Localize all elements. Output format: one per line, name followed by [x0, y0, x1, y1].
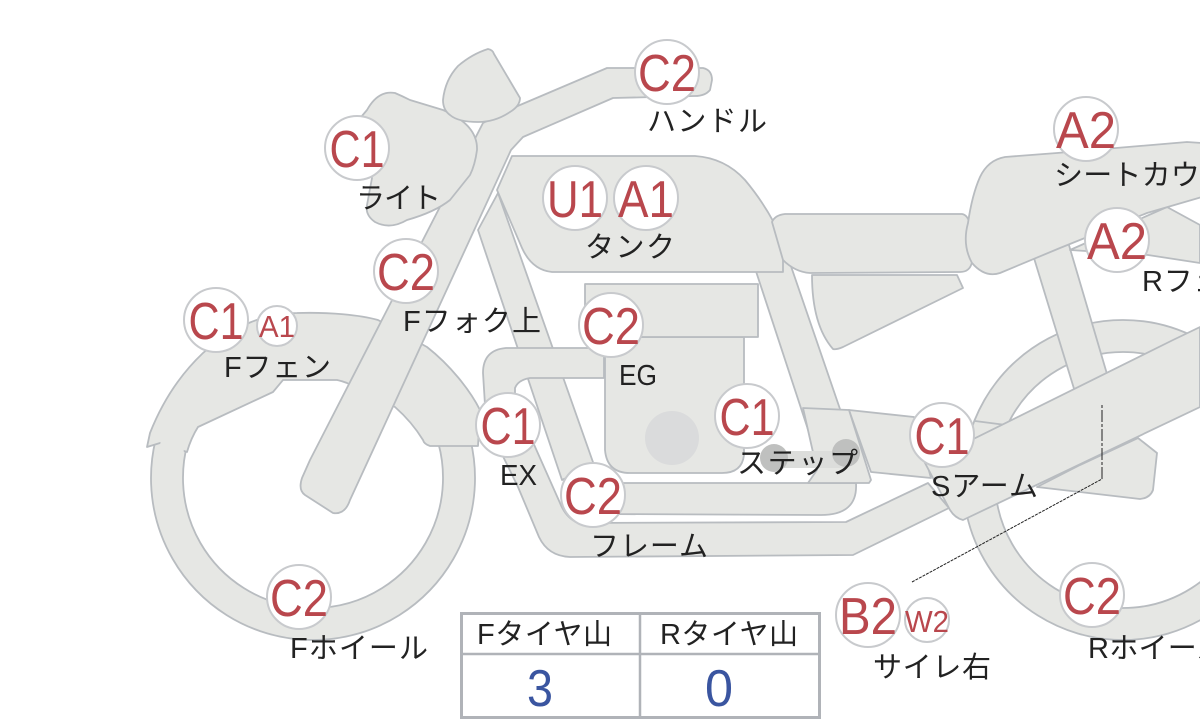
seat cowl — [966, 142, 1200, 274]
rear wheel — [963, 320, 1200, 640]
front fender — [147, 313, 480, 452]
muffler leader line — [912, 405, 1102, 582]
rear plate — [803, 408, 871, 483]
badge: exhaust C1: C1 — [480, 398, 536, 456]
badge: step C1: C1 — [720, 389, 774, 447]
label: exhaust: EX — [500, 460, 537, 492]
engine — [605, 337, 744, 473]
label: step: ステップ — [737, 448, 858, 480]
table header: rear tyre: Rタイヤ山 — [660, 619, 798, 651]
swing arm strip — [925, 327, 1200, 520]
badge: light C1: C1 — [330, 121, 384, 179]
side cover — [812, 275, 963, 349]
table value: front tyre: 3 — [527, 660, 553, 718]
engine crank circle — [645, 411, 699, 465]
rear axle plate — [1037, 438, 1157, 499]
badge: front fender A1: A1 — [259, 309, 295, 344]
badge: rear wheel C2: C2 — [1063, 568, 1121, 626]
badge: tank U1: U1 — [547, 171, 603, 229]
rear frame tube — [749, 240, 841, 460]
fuel tank — [497, 156, 783, 272]
label: handle: ハンドル — [647, 106, 767, 138]
table: tyre tread — [461, 613, 820, 718]
engine head — [585, 284, 758, 337]
badge: frame C2: C2 — [564, 468, 622, 526]
label: front fender: Fフェン — [224, 352, 331, 384]
lower frame — [495, 440, 949, 557]
table header: front tyre: Fタイヤ山 — [477, 619, 612, 651]
rear wheel fender end line — [975, 421, 1006, 425]
front fork and handlebar — [301, 68, 712, 513]
label: frame: フレーム — [590, 531, 708, 563]
seat — [772, 214, 972, 273]
badge: seat cowl A2: A2 — [1056, 102, 1116, 160]
label: upper fork: Fフォク上 — [403, 306, 541, 338]
badge: front wheel C2: C2 — [270, 570, 328, 628]
badge: handle C2: C2 — [638, 45, 696, 103]
badge: swing arm C1: C1 — [914, 408, 970, 466]
badge: tank A1: A1 — [618, 171, 674, 229]
frame down tube — [478, 193, 594, 480]
badge: rear fender A2: A2 — [1087, 213, 1147, 271]
label: light: ライト — [356, 183, 441, 215]
table value: rear tyre: 0 — [705, 660, 733, 718]
badge: engine C2: C2 — [582, 298, 640, 356]
meter — [443, 49, 520, 122]
badge: fork C2: C2 — [377, 244, 435, 302]
badge: muffler B2: B2 — [839, 588, 897, 646]
rear shock — [1030, 235, 1107, 392]
swing arm — [849, 410, 931, 478]
exhaust pipe — [483, 348, 604, 405]
label: swing arm: Sアーム — [931, 471, 1038, 503]
label: engine: EG — [619, 360, 657, 392]
badge: front fender C1: C1 — [188, 293, 244, 351]
fender to wheel join — [157, 441, 184, 455]
rear fender — [1070, 207, 1200, 263]
step bar — [760, 439, 860, 472]
front wheel — [151, 316, 475, 640]
label: tank: タンク — [585, 232, 675, 264]
label: muffler right: サイレ右 — [873, 651, 991, 684]
label: front wheel: Fホイール — [290, 633, 428, 665]
muffler — [600, 483, 856, 515]
headlight — [350, 93, 477, 226]
badge: muffler W2: W2 — [905, 604, 949, 639]
